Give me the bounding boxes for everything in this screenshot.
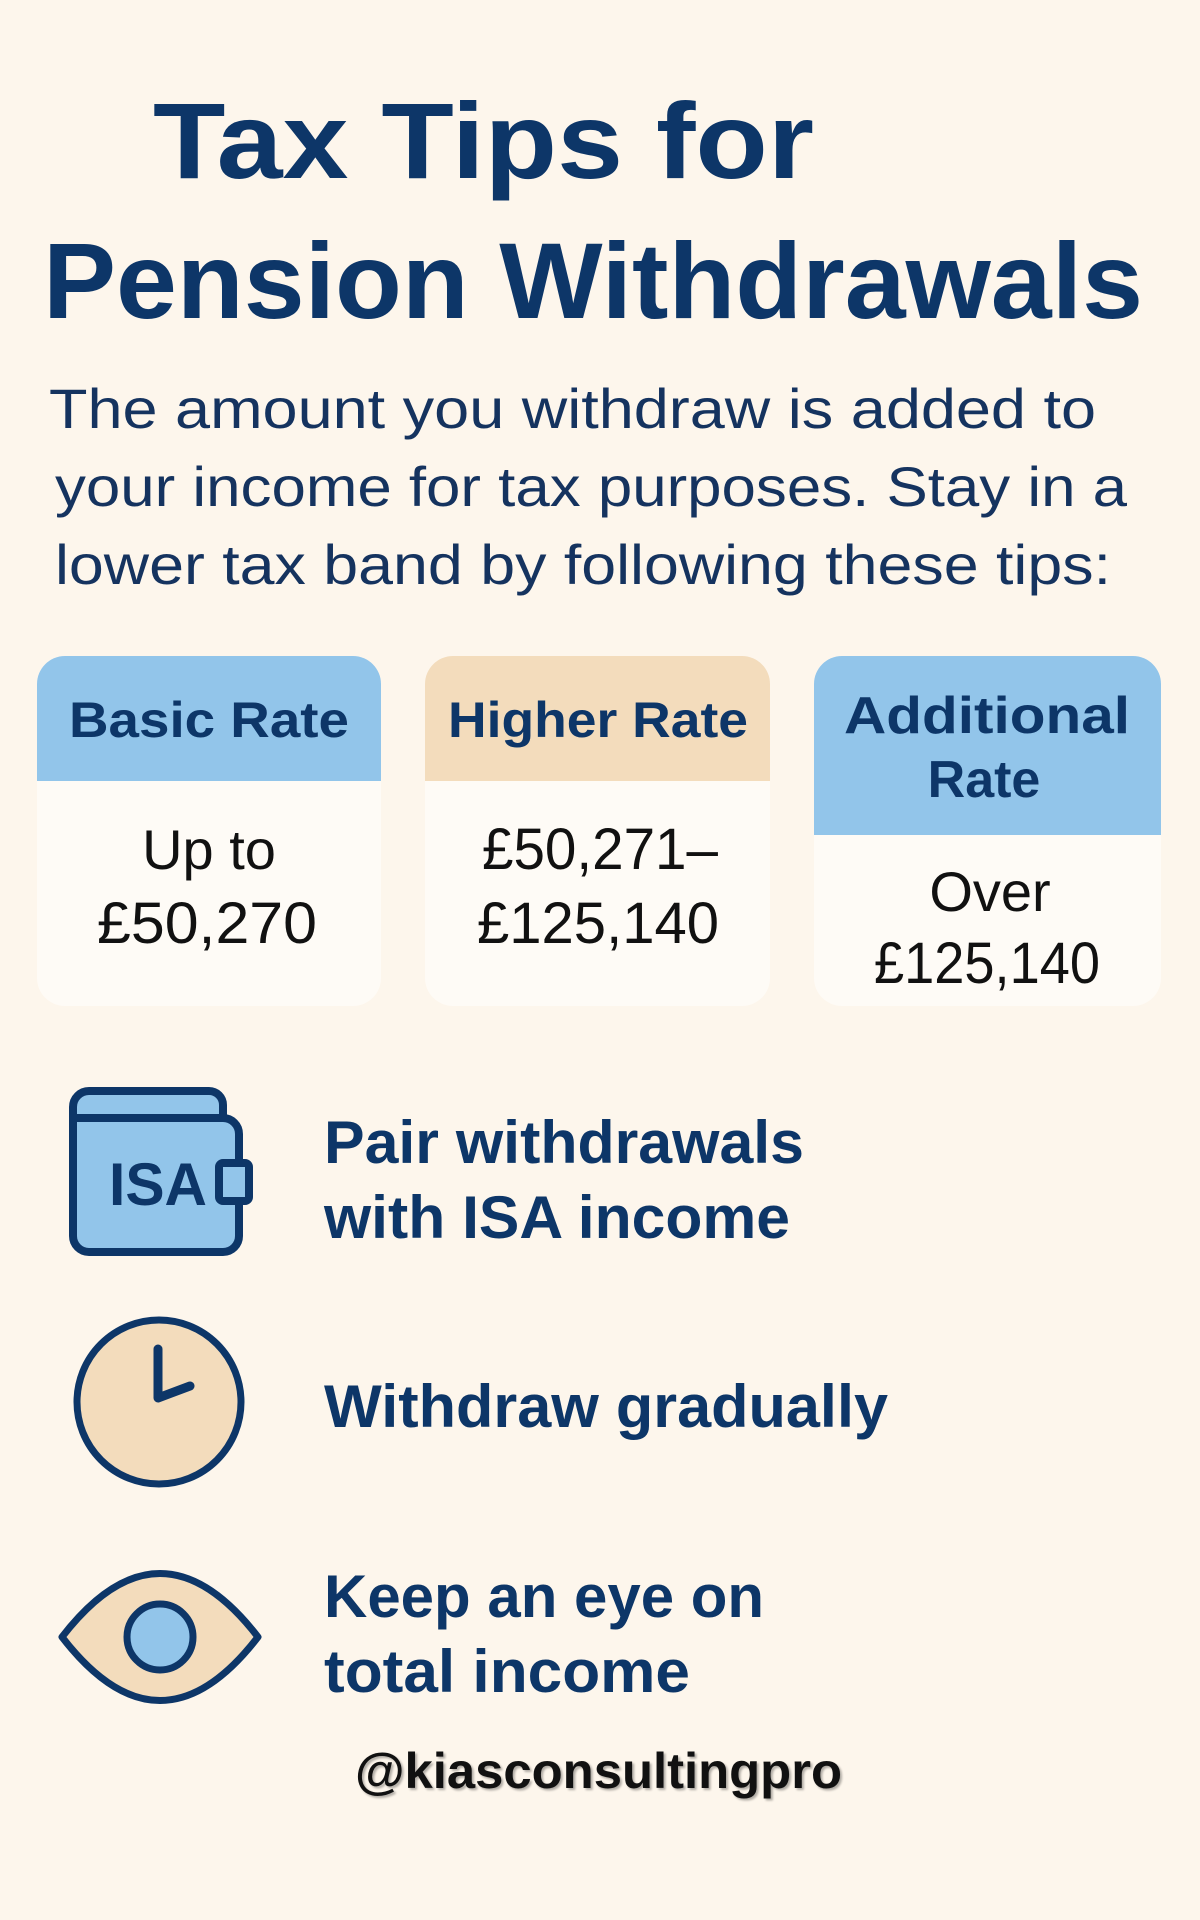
icon: ISA wallet: ISA (109, 1151, 207, 1218)
tip text: total income (324, 1563, 764, 1705)
tip text: gradually: Withdraw gradually (324, 1373, 889, 1440)
subtitle text: The amount you withdraw is added to (49, 377, 1096, 440)
panel: additional rate: Over (929, 860, 1051, 923)
icon: clock (77, 1320, 241, 1484)
title: Pension Withdrawals (43, 220, 1143, 341)
title: Tax Tips for (153, 80, 814, 201)
icon: ISA wallet (73, 1091, 249, 1252)
handle: @kiasconsultingpro (355, 1743, 842, 1799)
panel: basic rate (37, 656, 381, 1006)
tip text: ISA (323, 1109, 804, 1251)
tip text: total income: total income (324, 1638, 690, 1705)
panel: higher rate: £125,140 (477, 891, 719, 956)
panel: additional rate: £125,140 (874, 931, 1100, 996)
panel: additional rate (814, 656, 1161, 1006)
panel: higher rate (425, 656, 770, 1006)
tip text: ISA: Pair withdrawals (324, 1109, 804, 1176)
panel: additional rate: Additional (844, 687, 1130, 745)
panel: basic rate: Up to (142, 818, 276, 881)
panel: additional rate: Rate (928, 751, 1040, 809)
subtitle text (49, 377, 1128, 596)
panel: higher rate: Higher Rate (448, 692, 748, 748)
subtitle text: lower tax band by following these tips: (55, 533, 1111, 596)
panel: higher rate: £50,271– (482, 817, 719, 882)
tip text: ISA: with ISA income (323, 1184, 790, 1251)
title (43, 80, 1143, 341)
panel: basic rate: £50,270 (97, 891, 317, 956)
subtitle text: your income for tax purposes. Stay in a (55, 455, 1128, 518)
tip text: total income: Keep an eye on (324, 1563, 764, 1630)
icon: eye (62, 1574, 258, 1700)
panel: basic rate: Basic Rate (69, 692, 349, 748)
